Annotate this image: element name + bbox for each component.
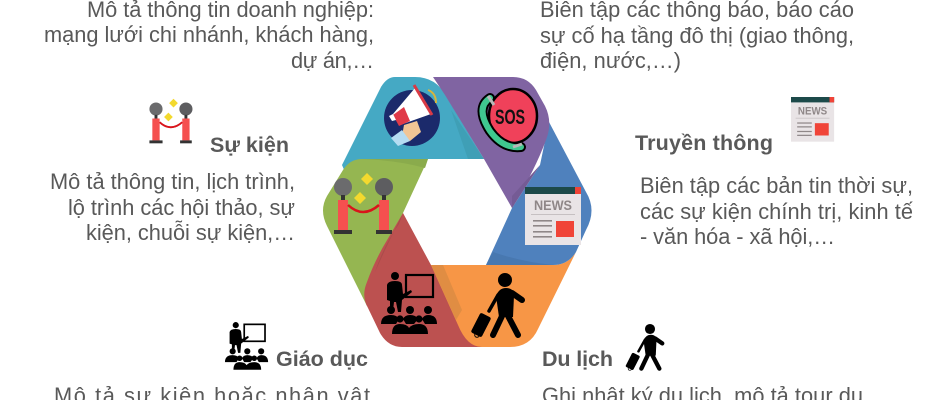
text: sự kiện description: Mô tả thông tin, lịch trình, [50,169,295,194]
segment: red [364,213,482,347]
text: doanh nghiệp description: dự án,… [291,48,374,73]
icon: traveler [471,273,522,338]
heading: Du lịch: Du lịch [542,347,613,371]
icon: small newspaper: NEWS [798,106,827,118]
text: sự cố description [540,0,854,73]
segment: orange [431,252,576,347]
icon: SOS phone [482,89,537,147]
shading: segment overlaps [360,110,553,320]
icon: megaphone and hand [384,85,440,146]
text: sự cố description: điện, nước,…) [540,48,681,73]
segment: teal [342,77,484,172]
icon: small newspaper [791,97,834,142]
heading: Sự kiện: Sự kiện [210,133,289,157]
icon: teacher [381,272,437,334]
icon: small stanchion [149,99,192,143]
heading: Truyền thông: Truyền thông [635,131,773,155]
text: sự kiện description: kiện, chuỗi sự kiện,… [86,220,295,245]
icon: newspaper [525,187,581,245]
text: sự cố description: sự cố hạ tầng đô thị (giao thông, [540,23,854,48]
icon: small teacher [225,322,268,370]
heading: Giáo dục: Giáo dục [276,347,368,371]
text: truyền thông description: Biên tập các bản tin thời sự, [640,173,913,198]
icon: stanchion [334,173,393,234]
text: sự kiện description: lộ trình các hội thảo, sự [68,195,295,220]
text: truyền thông description [640,173,913,249]
segment: green [323,159,428,306]
icon: SOS phone: SOS [495,105,525,129]
segment: purple [433,77,549,208]
text: truyền thông description: các sự kiện chính trị, kinh tế [640,199,913,224]
icon: newspaper: NEWS [534,197,572,213]
text: truyền thông description: - văn hóa - xã hội,… [640,224,835,249]
segment: blue [486,122,592,265]
text: doanh nghiệp description: mạng lưới chi nhánh, khách hàng, [44,22,374,47]
text: doanh nghiệp description [44,0,374,73]
icon: small traveler [625,324,662,370]
hexagon cycle diagram [323,77,592,347]
text: sự kiện description [50,169,295,245]
